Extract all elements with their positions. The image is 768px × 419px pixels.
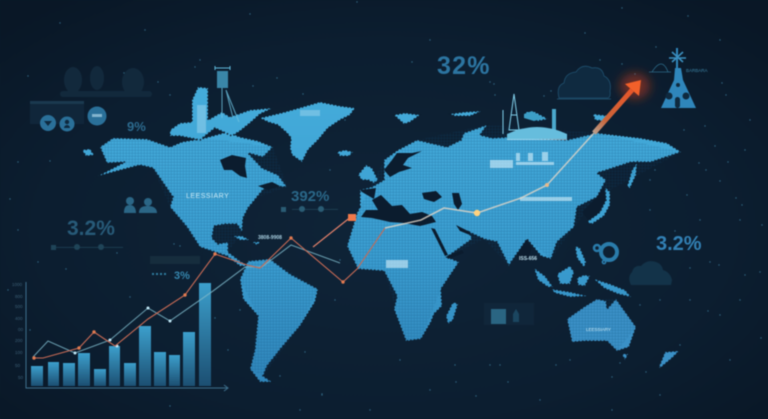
y axis tick labels: 00 xyxy=(18,327,24,332)
Madagascar xyxy=(446,302,458,324)
label: map title: LEESSIARY xyxy=(186,193,229,200)
Aleutians xyxy=(82,149,94,156)
icon: people silhouettes top left xyxy=(60,66,152,97)
icon: people group xyxy=(124,197,157,213)
Gulf of St Lawrence xyxy=(258,182,280,190)
y axis tick labels: 200 xyxy=(15,338,23,343)
Mediterranean xyxy=(361,195,436,226)
y axis tick labels: 50 xyxy=(18,375,24,380)
North America xyxy=(98,132,287,266)
icon: gears xyxy=(594,244,617,264)
label: 3.2% right: 3.2% xyxy=(656,233,702,255)
Greenland xyxy=(260,102,355,162)
label: code caption: 3808-9908 xyxy=(258,235,282,241)
Southeast Asia islands xyxy=(534,246,631,297)
y axis tick labels: 50 xyxy=(15,363,21,368)
inland seas xyxy=(220,151,605,262)
Japan and Sakhalin xyxy=(587,163,637,224)
bars xyxy=(31,283,211,386)
icon: hills outline xyxy=(649,64,671,72)
label: 3.2% left: 3.2% xyxy=(67,217,115,240)
Red Sea and Persian Gulf xyxy=(431,225,470,256)
y axis tick labels: 100 xyxy=(15,350,23,355)
South America xyxy=(240,259,318,382)
British Isles xyxy=(358,165,378,183)
Baltic and North Sea xyxy=(384,151,422,177)
Bay of Bengal head xyxy=(517,240,532,262)
land detail marks xyxy=(197,105,572,268)
teal line nodes xyxy=(75,308,170,353)
y axis tick labels: 800 xyxy=(15,294,23,299)
Iceland xyxy=(337,150,353,156)
Arctic islands xyxy=(170,87,273,140)
Gulf of Aden xyxy=(447,250,464,259)
label: far east caption: BARBARA xyxy=(686,68,708,73)
Sea of Japan xyxy=(582,187,605,220)
y axis tick labels xyxy=(12,282,24,380)
label: Australia caption: LEESSIARY xyxy=(586,327,611,332)
red line nodes xyxy=(34,238,343,358)
axes xyxy=(26,282,228,391)
y axis tick labels: 1000 xyxy=(12,282,23,287)
Black Sea xyxy=(422,191,442,202)
label: 32%: 32% xyxy=(437,52,491,80)
label: ocean caption: ISS-656 xyxy=(519,256,537,262)
world map xyxy=(82,87,681,382)
label: 9%: 9% xyxy=(127,119,146,134)
Australia and New Zealand xyxy=(567,299,679,368)
Svalbard and Arctic isles xyxy=(394,111,610,124)
icon: radio tower over Russia xyxy=(503,94,567,139)
icon: tower at top of North America xyxy=(215,66,239,122)
label: 3%: 3% xyxy=(174,270,190,282)
label: 392%: 392% xyxy=(291,188,329,205)
main growth arrow xyxy=(385,73,650,228)
icon: observatory tower xyxy=(661,48,696,108)
icon: cloud network xyxy=(557,66,611,99)
y axis tick labels: 500 xyxy=(15,304,23,309)
small arrow to Africa xyxy=(313,214,356,247)
Caspian Sea xyxy=(452,193,462,210)
icon: cloud lower right xyxy=(629,261,672,285)
continents xyxy=(82,87,681,382)
y axis tick labels: 400 xyxy=(15,316,23,321)
Hudson Bay xyxy=(220,155,247,178)
axis sliders xyxy=(51,206,338,274)
icon: building panel xyxy=(484,303,534,325)
teal trend line xyxy=(33,245,340,357)
Caribbean islands xyxy=(233,236,260,245)
Biscay xyxy=(360,188,376,199)
bar chart xyxy=(12,228,385,391)
grid texture xyxy=(100,125,681,376)
red trend line xyxy=(34,228,385,358)
Eurasia and Africa xyxy=(347,125,681,341)
panel: icon strip xyxy=(30,101,106,132)
